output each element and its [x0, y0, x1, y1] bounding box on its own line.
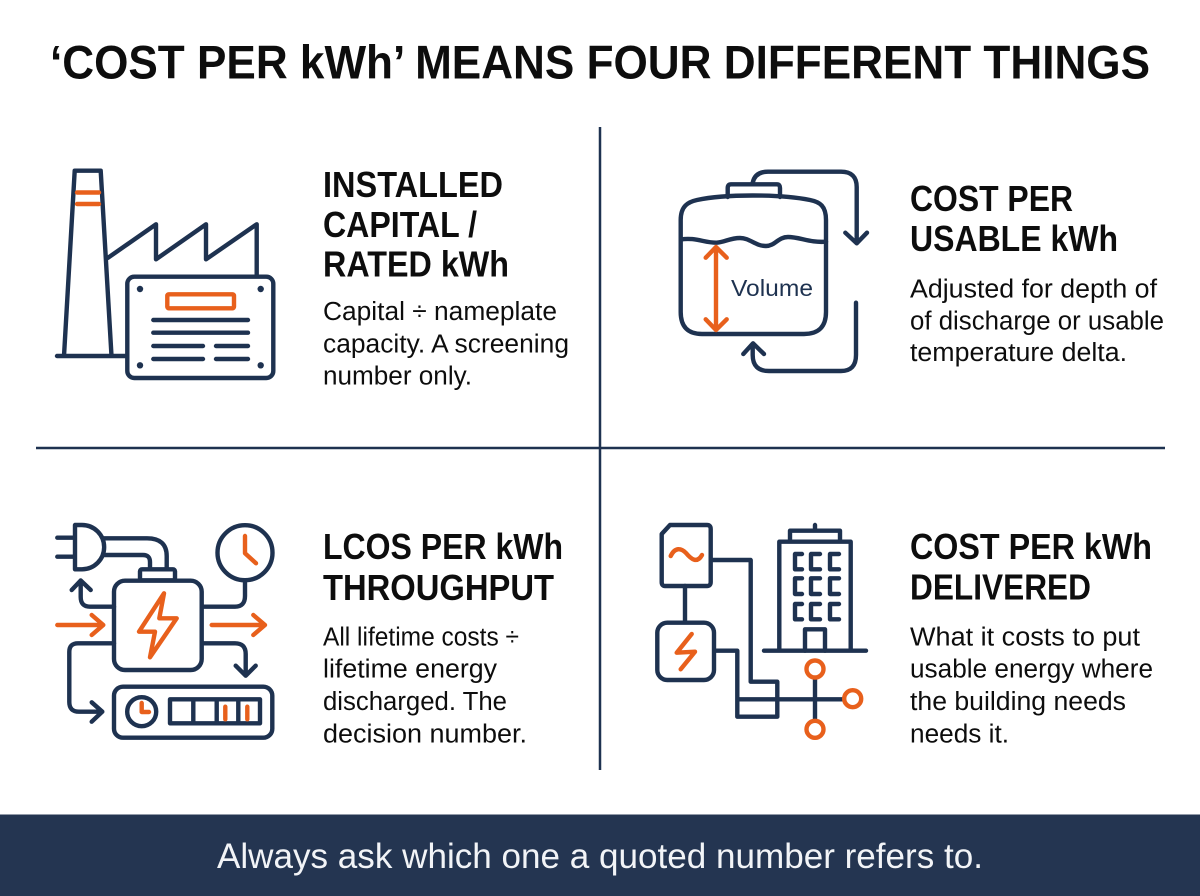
panel: installed capital: [57, 164, 569, 390]
label: volume: Volume: [731, 275, 813, 301]
heading: LCOS: LCOS PER kWh: [323, 526, 563, 567]
heading: delivered: COST PER kWh: [910, 526, 1152, 567]
text: delivered description: usable energy where: [910, 656, 1153, 684]
icon: storage tank: [681, 172, 867, 371]
heading: usable cost: USABLE kWh: [910, 218, 1118, 259]
icon: battery with flows: [57, 525, 272, 738]
panel: usable cost: [681, 172, 1164, 371]
panel: delivered: [657, 525, 1153, 748]
heading: LCOS: THROUGHPUT: [323, 567, 554, 608]
text: LCOS description: lifetime energy: [323, 656, 497, 684]
text: delivered description: needs it.: [910, 720, 1009, 748]
heading: installed capital: INSTALLED: [323, 164, 503, 205]
text: installed capital description: number only.: [323, 362, 472, 390]
text: usable cost description: Adjusted for depth of: [910, 275, 1158, 303]
text: installed capital description: capacity. A screening: [323, 330, 569, 358]
heading: installed capital: CAPITAL /: [323, 204, 477, 245]
heading: usable cost: COST PER: [910, 178, 1073, 219]
heading: installed capital: RATED kWh: [323, 244, 509, 285]
icon: factory with nameplate: [57, 171, 273, 378]
text: usable cost description: of discharge or usable: [910, 307, 1164, 335]
text: LCOS description: decision number.: [323, 720, 527, 748]
panel: LCOS: [57, 525, 563, 748]
footer banner: [0, 814, 1200, 896]
icon: inverter, battery, building and grid: [657, 525, 866, 738]
text: usable cost description: temperature delta.: [910, 339, 1127, 367]
text: delivered description: the building needs: [910, 688, 1126, 716]
text: LCOS description: discharged. The: [323, 688, 507, 716]
text: delivered description: What it costs to put: [910, 624, 1140, 652]
text: LCOS description: All lifetime costs ÷: [323, 624, 519, 652]
text: installed capital description: Capital ÷ nameplate: [323, 298, 557, 326]
title: ‘COST PER kWh’ MEANS FOUR DIFFERENT THINGS: [50, 36, 1150, 89]
heading: delivered: DELIVERED: [910, 566, 1091, 608]
footer banner: Always ask which one a quoted number refers to.: [217, 836, 983, 876]
